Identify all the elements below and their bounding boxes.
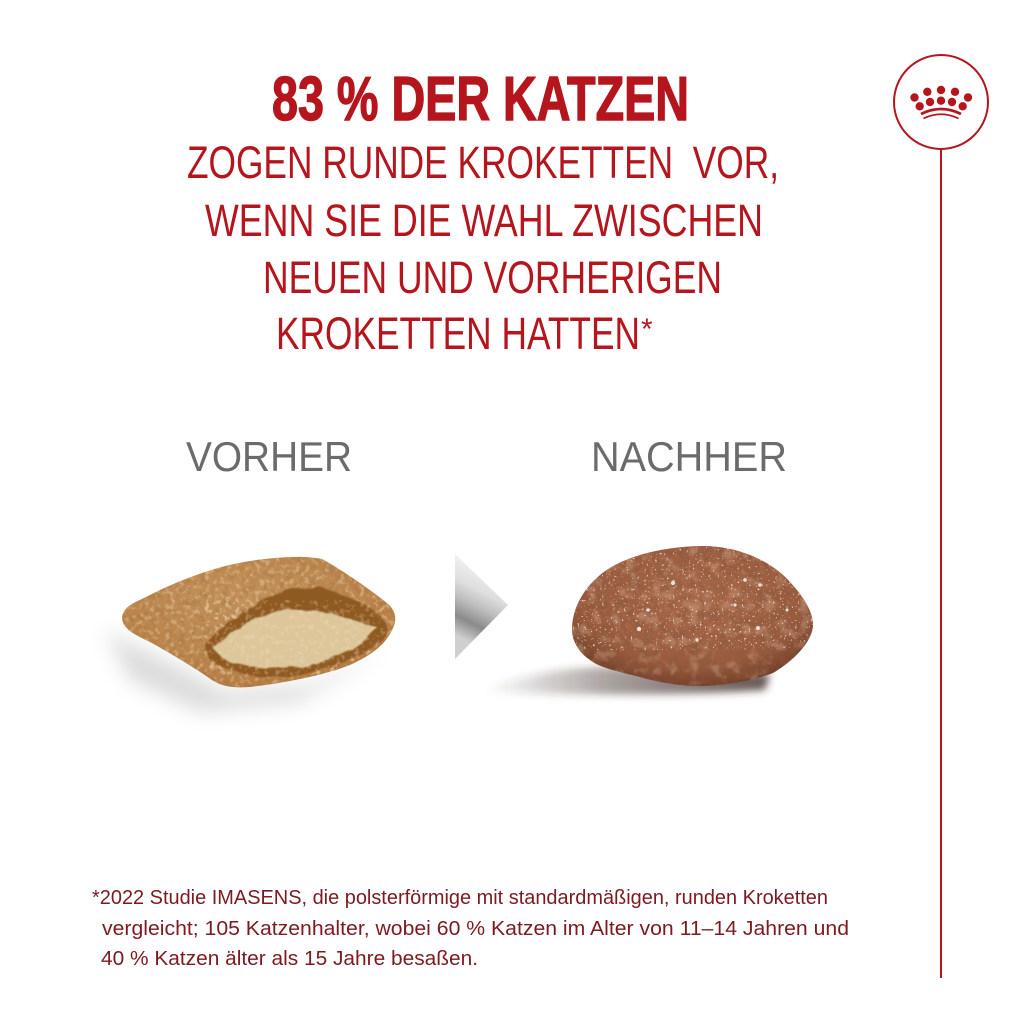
- footnote: *2022 Studie IMASENS, die polsterförmige mit standardmäßigen, runden Kroketten: [92, 887, 828, 909]
- icon: crown: [910, 86, 972, 118]
- label: nachher: NACHHER: [591, 433, 787, 480]
- kibble body: [572, 546, 814, 686]
- subtitle text block: WENN SIE DIE WAHL ZWISCHEN: [205, 195, 763, 246]
- title: 83 % DER KATZEN: [272, 65, 689, 134]
- footnote: [92, 887, 849, 970]
- pillow kibble (before): [105, 550, 405, 712]
- label: vorher: VORHER: [186, 433, 352, 480]
- kibble shadow: [105, 630, 385, 712]
- kibble shadow: [485, 667, 770, 695]
- kibble body: [122, 556, 396, 688]
- arrow: [455, 554, 508, 659]
- logo badge with vertical line: [894, 55, 988, 978]
- subtitle text block: KROKETTEN HATTEN: [276, 308, 640, 359]
- round kibble (after): [485, 540, 820, 695]
- salt sparkles: [637, 578, 788, 642]
- footnote: 40 % Katzen älter als 15 Jahre besaßen.: [101, 948, 478, 970]
- footnote: vergleicht; 105 Katzenhalter, wobei 60 % Katzen im Alter von 11–14 Jahren und: [102, 918, 849, 940]
- subtitle text block: [187, 137, 779, 359]
- logo circle: [894, 55, 988, 149]
- subtitle text block: NEUEN UND VORHERIGEN: [263, 252, 722, 303]
- vertical line: [940, 149, 942, 978]
- subtitle text block: *: [641, 313, 653, 346]
- subtitle text block: ZOGEN RUNDE KROKETTEN VOR,: [187, 137, 779, 188]
